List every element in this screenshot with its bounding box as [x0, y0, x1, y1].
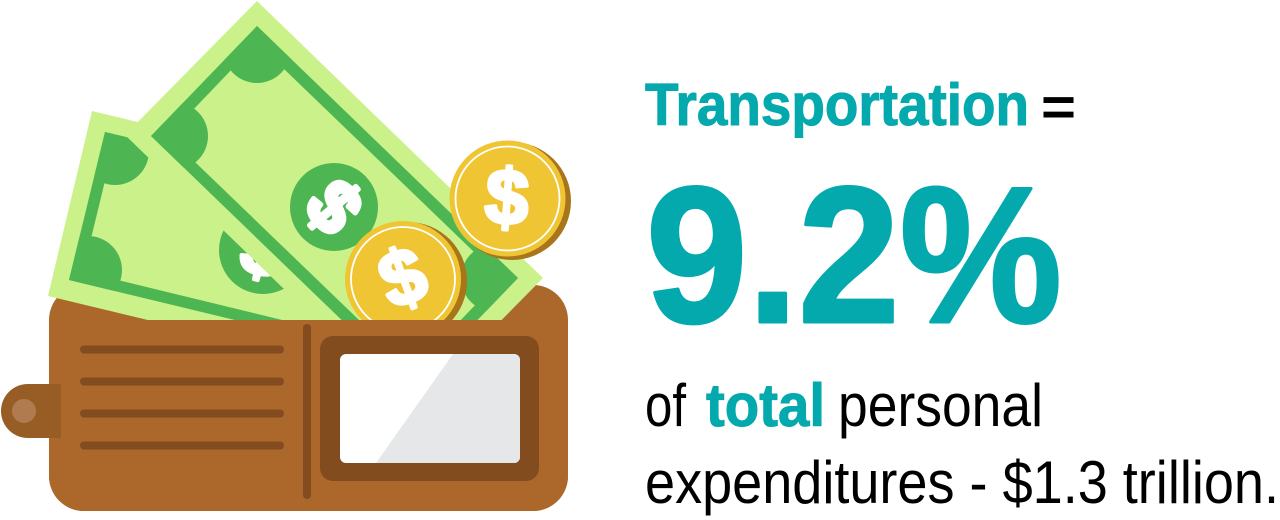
text: of total personal: total: [706, 372, 825, 439]
wallet front panel: [49, 320, 568, 511]
wallet back panel: [49, 285, 568, 511]
heading: Transportation =: Transportation: [645, 72, 1029, 138]
back banknote: [127, 1, 543, 320]
icon: wallet with cash and coins: [1, 1, 571, 511]
front banknote: $: [233, 204, 293, 295]
wallet card window: [320, 336, 539, 481]
text: of total personal: of: [645, 372, 686, 439]
wallet clasp: [1, 384, 61, 438]
back banknote: $: [289, 164, 379, 249]
big number: 9.2%: 9.2%: [646, 147, 1062, 364]
text: of total personal: [645, 372, 1043, 439]
heading: Transportation =: =: [1041, 77, 1076, 137]
lower gold coin: [345, 221, 467, 340]
text: of total personal: personal: [838, 372, 1043, 439]
upper gold coin: $: [482, 152, 532, 242]
banknote center seal: [290, 163, 378, 251]
lower gold coin: $: [367, 228, 438, 326]
front banknote: [48, 111, 316, 320]
wallet stitching lines: [80, 324, 311, 499]
upper gold coin: [450, 140, 571, 260]
